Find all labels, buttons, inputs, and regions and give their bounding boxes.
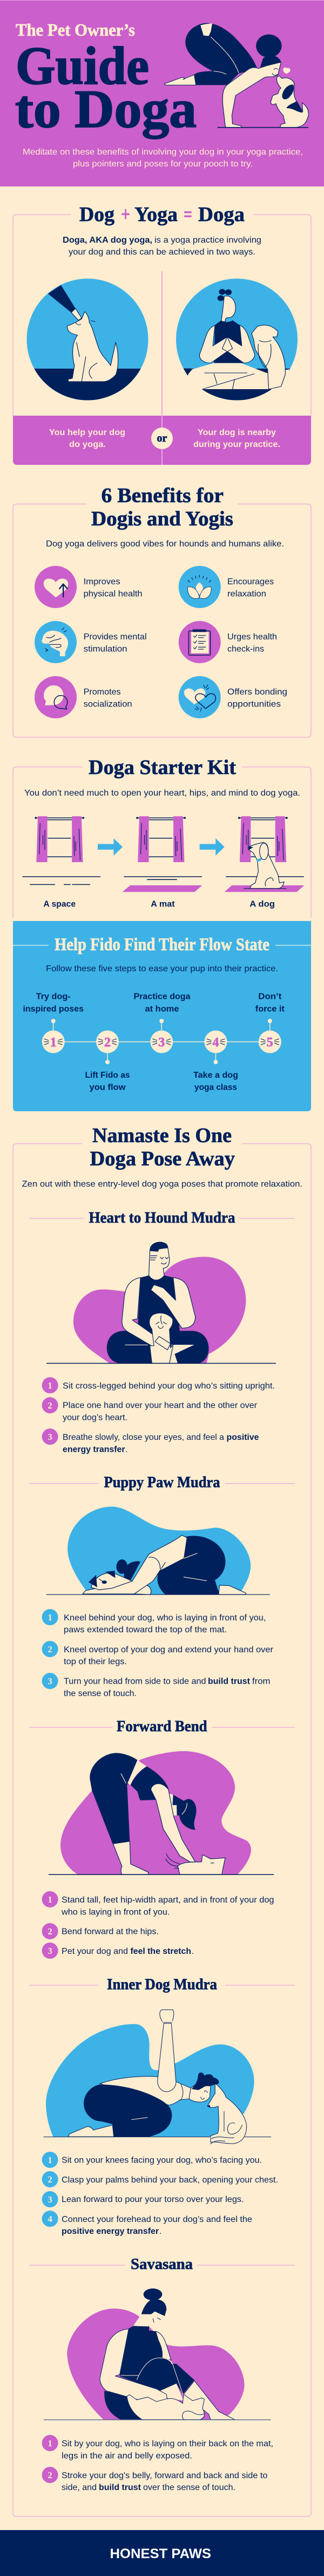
benefit: relaxation <box>179 566 274 608</box>
benefit: physical health: physical health <box>84 589 143 599</box>
step 1: inspired poses <box>23 1004 84 1014</box>
step <box>42 1943 194 1959</box>
step 2: 2 <box>104 1036 111 1050</box>
title: Guide <box>16 36 149 96</box>
step: Breathe slowly, close your eyes, and feel a <box>63 1433 224 1442</box>
step: positive <box>227 1433 259 1442</box>
instructions <box>42 1377 275 1454</box>
step 1 <box>23 992 84 1053</box>
step <box>42 1377 275 1393</box>
heading: Help Fido Find Their Flow State <box>55 935 269 955</box>
step: over the sense of touch. <box>143 2483 235 2492</box>
panel: dog plus yoga equals doga <box>13 203 311 465</box>
step: 1 <box>48 2155 52 2165</box>
benefit: mental stimulation <box>35 621 147 663</box>
step 4: 4 <box>213 1036 219 1050</box>
instructions <box>42 1891 274 1959</box>
option: your dog is nearby: Your dog is nearby <box>198 428 276 437</box>
step <box>42 1609 266 1634</box>
option: you help your dog: You help your dog <box>49 428 125 437</box>
illustration <box>46 1507 269 1594</box>
hero subtitle: Meditate on these benefits of involving your dog in your yoga practice, <box>23 148 303 157</box>
pose: savasana <box>29 2256 295 2492</box>
logo: HONEST PAWS <box>110 2546 211 2561</box>
step <box>42 2152 262 2168</box>
step: Kneel overtop of your dog and extend your hand over <box>64 1645 274 1654</box>
heading: Doga Starter Kit <box>89 756 236 779</box>
kit item: a space <box>23 816 100 909</box>
benefit: socialization <box>35 676 132 718</box>
hero illustration: woman nose to nose with dog <box>164 23 308 128</box>
benefit: health check-ins <box>179 621 277 663</box>
step <box>42 2435 273 2461</box>
step 2: you flow <box>90 1083 126 1092</box>
step: build trust <box>208 1677 251 1686</box>
kit item: a mat: A mat <box>151 899 175 909</box>
title: to Doga <box>15 79 197 139</box>
step <box>42 2191 244 2207</box>
step: Sit on your knees facing your dog, who’s facing you. <box>62 2156 262 2165</box>
step: 3 <box>48 2194 52 2205</box>
pose: puppy paw mudra <box>29 1474 295 1698</box>
illustration: you help your dog do yoga <box>26 278 148 401</box>
step: energy transfer <box>63 1445 125 1454</box>
step <box>42 1891 274 1917</box>
hero banner <box>0 0 324 186</box>
step: 3 <box>48 1676 52 1686</box>
benefit: physical health: Improves <box>84 577 120 586</box>
heading: = <box>184 203 192 226</box>
or badge: or <box>157 432 167 444</box>
benefit: mental stimulation: stimulation <box>84 645 127 654</box>
kit item: a dog <box>225 816 304 909</box>
benefit: relaxation: relaxation <box>227 589 266 599</box>
pose heading: Puppy Paw Mudra <box>104 1474 220 1491</box>
benefit: socialization: Promotes <box>84 688 121 697</box>
step: 3 <box>48 1432 52 1442</box>
illustration: your dog is nearby during your practice <box>176 278 298 401</box>
step <box>42 1397 258 1423</box>
step: 2 <box>48 2470 52 2480</box>
heading: Namaste Is One <box>92 1124 232 1147</box>
step <box>42 2211 252 2236</box>
step: top of their legs. <box>64 1657 127 1666</box>
benefit: relaxation: Encourages <box>227 577 274 586</box>
step: Bend forward at the hips. <box>62 1927 159 1936</box>
heading: Doga <box>198 203 245 226</box>
step 5 <box>255 992 285 1053</box>
step <box>42 1429 259 1454</box>
step: your dog’s heart. <box>63 1413 127 1423</box>
pose: inner dog mudra <box>29 1977 295 2236</box>
step: side, and <box>62 2483 97 2492</box>
step: the sense of touch. <box>64 1689 137 1698</box>
step: Clasp your palms behind your back, opening your chest. <box>62 2175 278 2185</box>
subheading: Follow these five steps to ease your pup into their practice. <box>46 964 278 973</box>
benefit: bonding: opportunities <box>227 699 281 709</box>
step 3: Practice doga <box>134 992 191 1001</box>
benefit: bonding: Offers bonding <box>227 688 287 697</box>
step: 3 <box>48 1946 52 1956</box>
pose heading: Heart to Hound Mudra <box>89 1210 235 1226</box>
pose heading: Savasana <box>131 2256 193 2273</box>
instructions <box>42 2435 273 2492</box>
step <box>42 1923 159 1939</box>
title: The Pet Owner’s <box>16 20 135 39</box>
heading: 6 Benefits for <box>102 484 224 507</box>
intro text: your dog and this can be achieved in two ways. <box>69 248 255 257</box>
step timeline <box>23 992 285 1092</box>
step: paws extended toward the top of the mat. <box>64 1625 227 1634</box>
heading: Dog <box>79 203 114 226</box>
heading: Doga Pose Away <box>90 1147 235 1170</box>
step 4 <box>193 1030 238 1092</box>
illustration <box>46 1242 276 1364</box>
benefit: health check-ins: check-ins <box>227 645 264 654</box>
step: . <box>125 1445 127 1454</box>
panel: help fido find their flow state <box>13 921 311 1111</box>
step: who is laying in front of you. <box>61 1908 170 1917</box>
step 5: 5 <box>267 1036 273 1050</box>
panel: 6 benefits <box>13 484 311 737</box>
subheading: You don’t need much to open your heart, hips, and mind to dog yoga. <box>24 789 300 798</box>
step: 2 <box>48 2174 52 2185</box>
pose heading: Inner Dog Mudra <box>107 1977 217 1993</box>
benefit: health check-ins: Urges health <box>227 632 277 642</box>
step <box>42 1641 274 1666</box>
step 4: Take a dog <box>193 1071 238 1080</box>
instructions <box>42 2152 278 2236</box>
illustration <box>44 2010 271 2144</box>
heading: Dogis and Yogis <box>91 508 233 530</box>
or badge <box>151 428 173 449</box>
step <box>42 2171 278 2187</box>
step: 1 <box>48 1380 52 1391</box>
step 2: Lift Fido as <box>85 1071 130 1080</box>
step: legs in the air and belly exposed. <box>62 2452 192 2461</box>
step: from <box>252 1677 270 1686</box>
hero subtitle <box>23 148 303 169</box>
step: Stand tall, feet hip-width apart, and in front of your dog <box>62 1896 274 1905</box>
title <box>15 20 197 139</box>
option: your dog is nearby <box>193 428 280 449</box>
pose: heart to hound mudra <box>29 1210 295 1454</box>
pose heading: Forward Bend <box>117 1718 207 1735</box>
illustration <box>44 2288 271 2420</box>
step 1: Try dog- <box>36 992 71 1001</box>
step 3: 3 <box>158 1036 165 1050</box>
heading: + <box>121 203 130 226</box>
intro text: is a yoga practice involving <box>154 236 261 245</box>
heading: Yoga <box>134 203 178 226</box>
benefit: physical health <box>35 566 143 608</box>
step: Turn your head from side to side and <box>64 1677 206 1686</box>
option: you help your dog <box>49 428 125 449</box>
step: 1 <box>48 1612 52 1623</box>
intro text <box>63 236 261 257</box>
benefit: bonding <box>179 676 287 718</box>
option: you help your dog: do yoga. <box>69 440 106 449</box>
kit item: a dog: A dog <box>249 899 275 909</box>
step <box>42 1673 270 1698</box>
step: Stroke your dog's belly, forward and back and side to <box>62 2471 268 2480</box>
step 2 <box>85 1030 130 1092</box>
step: 1 <box>48 2438 52 2448</box>
arrow <box>200 838 225 856</box>
panel: namaste poses <box>13 1124 311 2517</box>
heading <box>79 203 245 226</box>
step 5: force it <box>255 1004 285 1014</box>
step 4: yoga class <box>194 1083 237 1092</box>
step: Lean forward to pour your torso over your legs. <box>62 2195 244 2204</box>
step: 2 <box>48 1926 52 1937</box>
step: Connect your forehead to your dog’s and feel the <box>62 2215 252 2224</box>
step 5: Don’t <box>258 992 282 1001</box>
kit item: a mat <box>123 816 202 909</box>
step: Pet your dog and <box>62 1947 128 1956</box>
panel: doga starter kit <box>13 756 311 918</box>
step: Kneel behind your dog, who is laying in front of you, <box>64 1613 266 1623</box>
instructions <box>42 1609 274 1698</box>
step: Sit cross-legged behind your dog who’s sitting upright. <box>63 1382 275 1391</box>
heading <box>91 484 233 530</box>
kit item: a space: A space <box>43 899 76 909</box>
arrow <box>98 838 123 856</box>
step: feel the stretch <box>131 1947 191 1956</box>
step: . <box>191 1947 194 1956</box>
step <box>42 2467 268 2492</box>
step 1: 1 <box>50 1036 57 1050</box>
hero subtitle: plus pointers and poses for your pooch to try. <box>73 159 253 169</box>
subheading: Zen out with these entry-level dog yoga poses that promote relaxation. <box>22 1179 302 1189</box>
benefit: socialization: socialization <box>84 699 132 709</box>
intro text: Doga, AKA dog yoga, <box>63 236 152 245</box>
step: . <box>159 2227 161 2236</box>
step 3 <box>134 992 191 1053</box>
heading <box>90 1124 235 1170</box>
subheading: Dog yoga delivers good vibes for hounds and humans alike. <box>46 539 284 549</box>
option: your dog is nearby: during your practice. <box>193 440 280 449</box>
step: positive energy transfer <box>62 2227 159 2236</box>
step: build trust <box>99 2483 141 2492</box>
step: 1 <box>48 1894 52 1905</box>
step: Place one hand over your heart and the other over <box>63 1401 258 1410</box>
step: 4 <box>48 2214 52 2224</box>
pose: forward bend <box>29 1718 295 1959</box>
purple answer band <box>13 416 311 465</box>
step 3: at home <box>145 1004 179 1014</box>
benefit: mental stimulation: Provides mental <box>84 632 147 642</box>
step: Sit by your dog, who is laying on their back on the mat, <box>62 2439 273 2448</box>
step: 2 <box>48 1644 52 1654</box>
step: 2 <box>48 1400 52 1411</box>
footer <box>0 2530 324 2576</box>
illustration <box>49 1751 274 1875</box>
